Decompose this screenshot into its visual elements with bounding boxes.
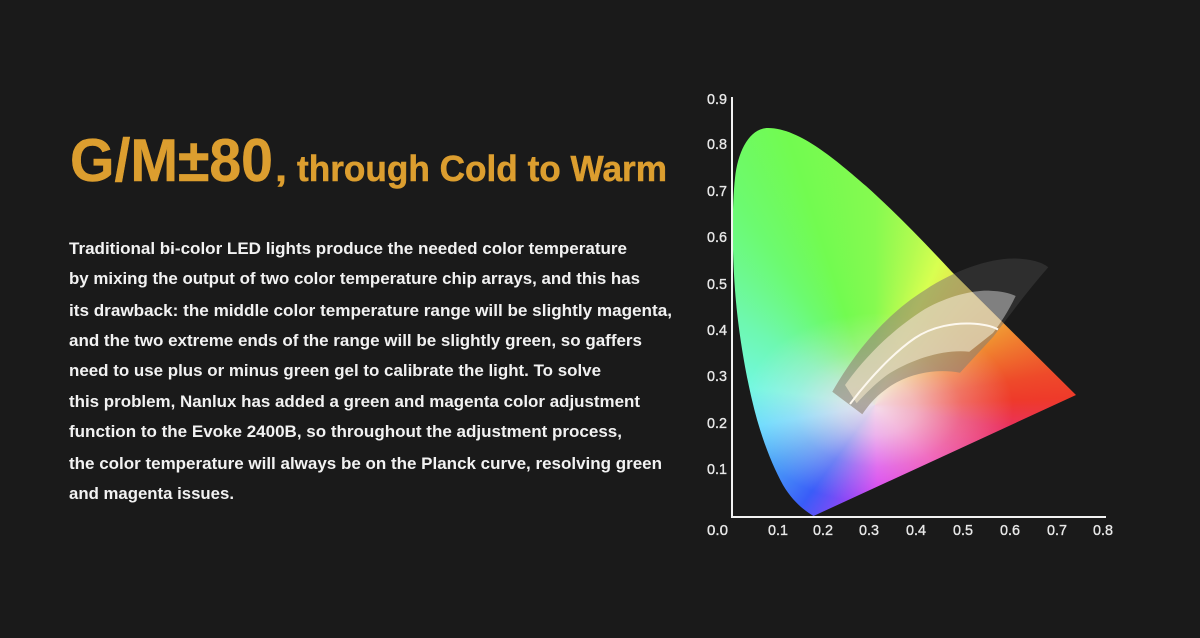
body text: function to the Evoke 2400B, so throughout the adjustment process, [69, 422, 622, 441]
x-axis labels: 0.4 [906, 522, 926, 539]
inner G/M band [845, 291, 1016, 403]
chart: chromaticity diagram [707, 94, 1112, 536]
band portions outside the gamut [832, 258, 1048, 414]
title: through Cold to Warm [297, 148, 667, 189]
y-axis labels: 0.6 [707, 229, 727, 246]
axes [732, 97, 1106, 517]
title: , [275, 148, 287, 189]
body text: need to use plus or minus green gel to calibrate the light. To solve [69, 361, 601, 380]
color gamut [733, 128, 1076, 516]
body text: the color temperature will always be on the Planck curve, resolving green [69, 454, 662, 473]
body text [69, 239, 672, 503]
y-axis labels: 0.7 [707, 183, 727, 200]
body text: and the two extreme ends of the range will be slightly green, so gaffers [69, 331, 642, 350]
x-axis labels: 0.5 [953, 522, 973, 539]
body text: its drawback: the middle color temperature range will be slightly magenta, [69, 301, 672, 320]
x-axis labels: 0.3 [859, 522, 879, 539]
y-axis labels: 0.1 [707, 461, 727, 478]
title [70, 127, 667, 194]
x-axis labels: 0.7 [1047, 522, 1067, 539]
body text: Traditional bi-color LED lights produce the needed color temperature [69, 239, 627, 258]
y-axis labels: 0.8 [707, 136, 727, 153]
body text: by mixing the output of two color temperature chip arrays, and this has [69, 269, 640, 288]
y-axis labels: 0.4 [707, 322, 727, 339]
y-axis labels [707, 91, 727, 478]
x-axis labels: 0.2 [813, 522, 833, 539]
x-axis labels: 0.6 [1000, 522, 1020, 539]
title: G/M±80 [70, 127, 273, 194]
y-axis labels: 0.2 [707, 415, 727, 432]
x-axis labels: 0.1 [768, 522, 788, 539]
y-axis labels: 0.5 [707, 276, 727, 293]
Planck curve [850, 323, 998, 404]
x-axis labels [707, 522, 1113, 539]
outer G/M band [832, 274, 1004, 414]
body text: and magenta issues. [69, 484, 234, 503]
body text: this problem, Nanlux has added a green and magenta color adjustment [69, 392, 640, 411]
x-axis labels: 0.0 [707, 522, 728, 539]
x-axis labels: 0.8 [1093, 522, 1113, 539]
y-axis labels: 0.3 [707, 368, 727, 385]
y-axis labels: 0.9 [707, 91, 727, 108]
